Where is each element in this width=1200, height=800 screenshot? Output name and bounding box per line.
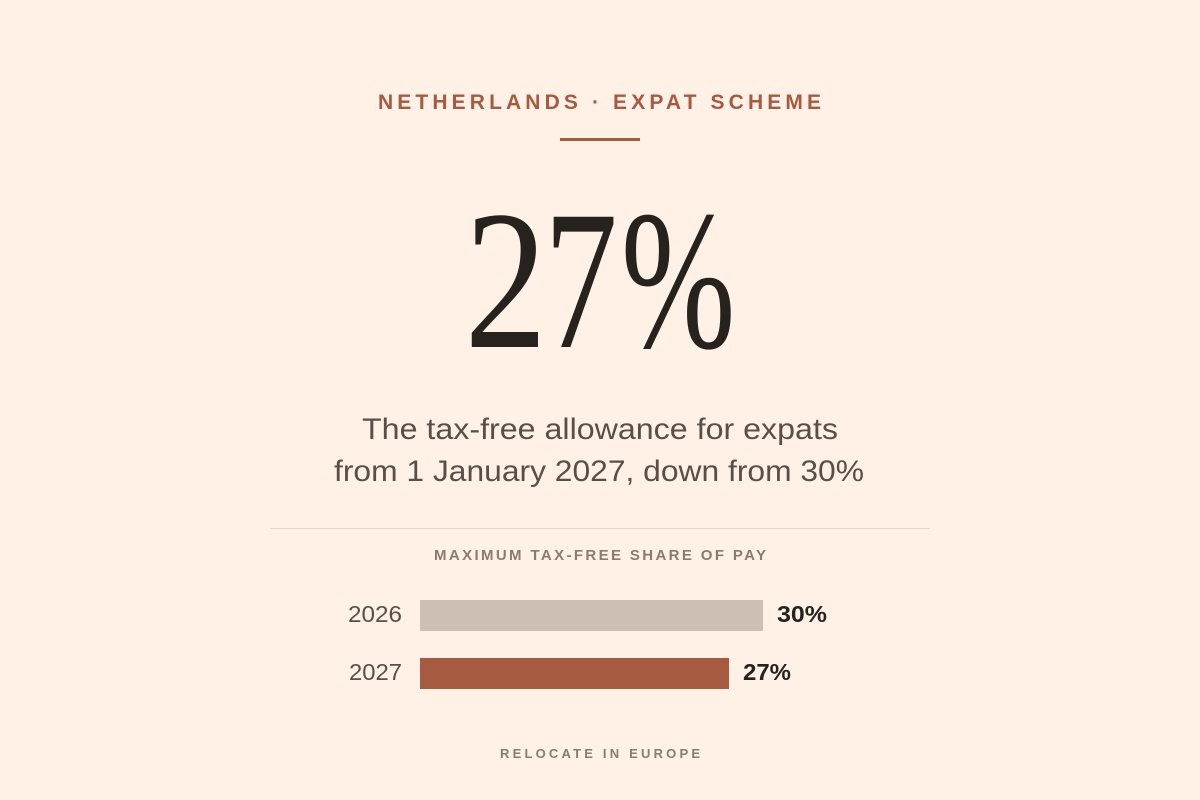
chart heading: MAXIMUM TAX-FREE SHARE OF PAY [434,547,766,564]
bar chart [348,600,827,689]
bar row: 2027: 27% [743,659,791,685]
accent rule [560,138,640,141]
footer credit: RELOCATE IN EUROPE [500,746,700,761]
description text [334,413,864,488]
eyebrow heading: NETHERLANDS · EXPAT SCHEME [378,91,821,114]
bar row: 2026 [348,600,827,631]
bar row: 2026: 30% [777,601,827,627]
headline figure: 27% [464,170,735,391]
headline figure: 27%: 2 [464,170,547,391]
description text: from 1 January 2027, down from 30% [334,455,864,488]
description text: The tax-free allowance for expats [362,413,838,446]
bar row: 2026: 2026 [348,601,402,627]
bar row: 2027: 2027 [349,659,402,685]
bar row: 2027 [349,658,791,689]
headline figure: 27%: 7 [544,170,618,390]
headline figure: 27%: % [621,170,735,390]
